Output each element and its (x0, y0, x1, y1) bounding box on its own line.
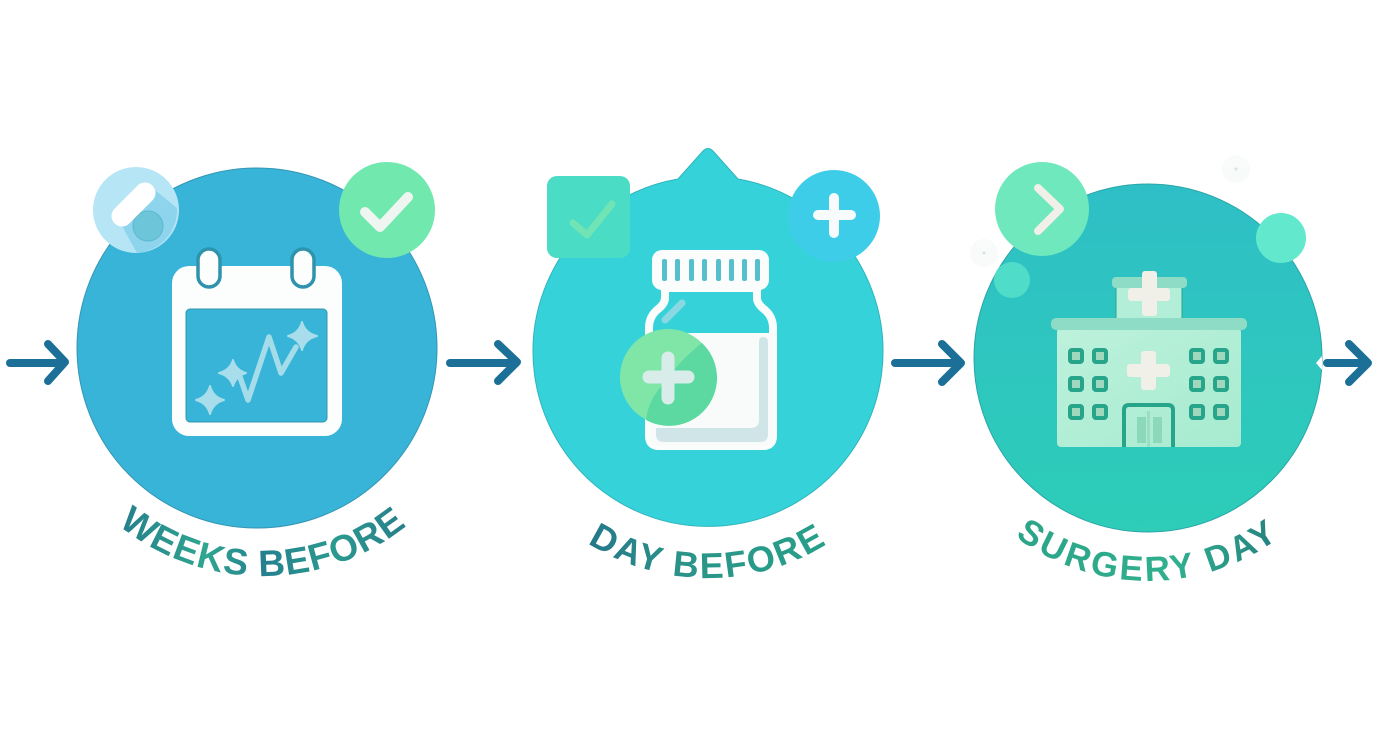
icon: pill badge (93, 167, 179, 253)
panel: surgery day (974, 162, 1322, 582)
icon: check square (547, 176, 630, 258)
label: surgery day: SURGERY DAY (1018, 518, 1271, 582)
icon: chevron badge (995, 162, 1089, 256)
main circle with peak: day before (533, 148, 883, 526)
faint dot upper right (1222, 155, 1250, 183)
icon: medicine bottle (649, 250, 773, 446)
panel: day before (532, 148, 884, 578)
arrow: entering step one (10, 344, 65, 381)
icon: check badge (339, 162, 435, 258)
icon: blue plus badge (788, 170, 880, 262)
label: day before: DAY BEFORE (589, 522, 826, 578)
accent circle right (1256, 213, 1306, 263)
accent circle left (994, 262, 1030, 298)
arrow: step two to step three (895, 344, 961, 382)
icon: green plus badge (620, 329, 717, 426)
icon: hospital (1051, 271, 1247, 447)
label: weeks before: WEEKS BEFORE (124, 504, 406, 576)
icon: calendar (172, 249, 342, 436)
main circle: surgery day (974, 184, 1322, 532)
notch on circle edge (1316, 356, 1322, 370)
arrow: leaving step three (1327, 344, 1368, 382)
faint dot left (970, 239, 998, 267)
arrow: step one to step two (450, 344, 517, 381)
main circle: weeks before (77, 168, 437, 528)
panel: weeks before (76, 162, 438, 576)
